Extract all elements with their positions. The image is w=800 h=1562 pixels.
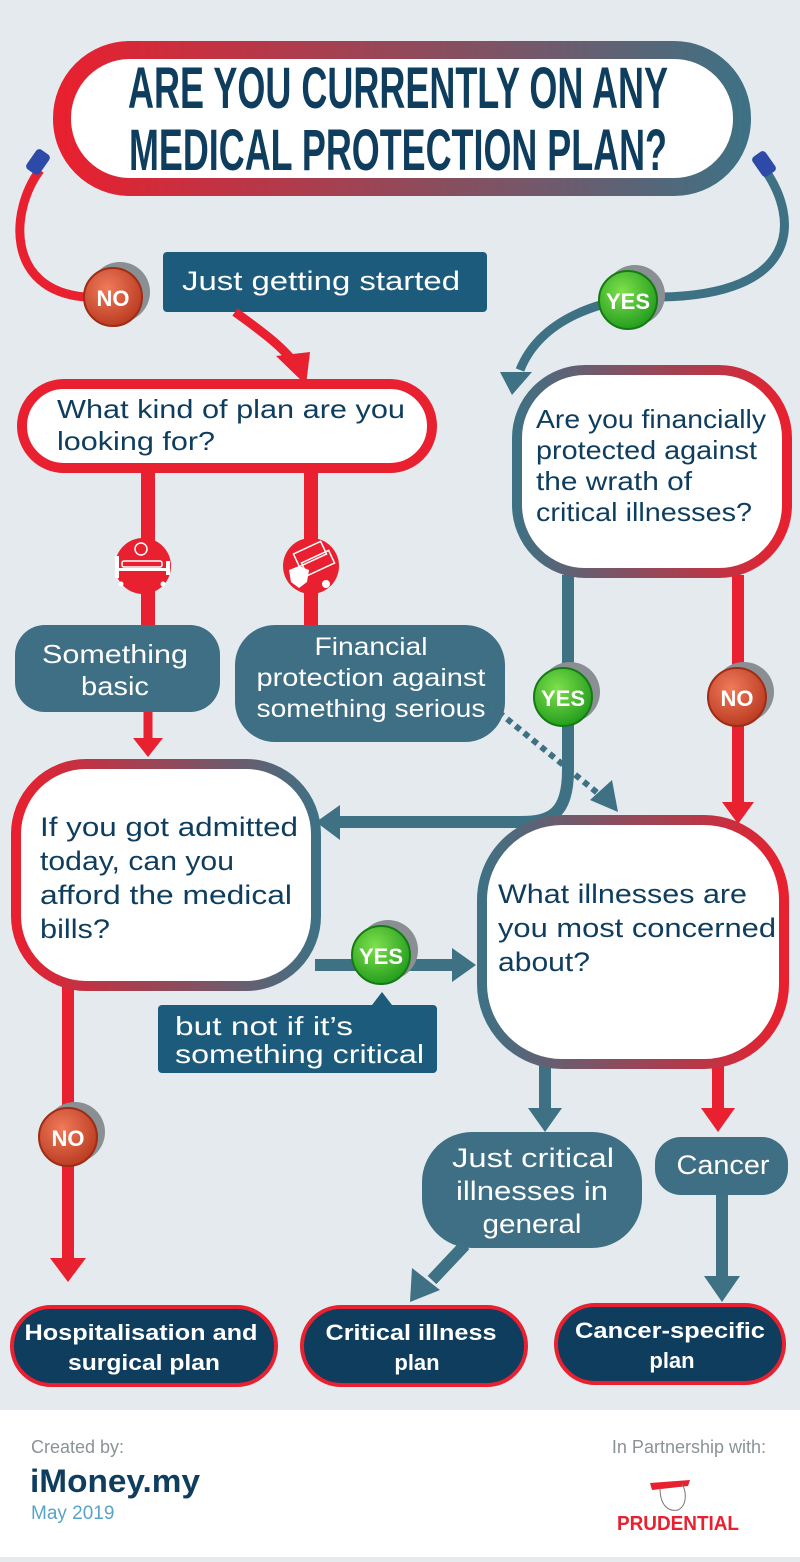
question: what kind of plan xyxy=(22,384,432,468)
footer: partnership xyxy=(612,1437,766,1535)
pill: something basic: Something xyxy=(42,639,188,669)
footer: partnership: In Partnership with: xyxy=(612,1437,766,1457)
footer: created by: iMoney.my xyxy=(30,1463,200,1499)
pill: just critical: general xyxy=(482,1209,582,1239)
button: NO top: NO xyxy=(96,286,130,311)
button: YES mid: YES xyxy=(541,686,585,711)
plan: hospitalisation: surgical plan xyxy=(68,1350,220,1375)
label: but not if critical: something critical xyxy=(175,1039,424,1069)
button: NO top xyxy=(84,262,150,326)
button: NO mid: NO xyxy=(720,686,754,711)
plan: cancer-specific xyxy=(556,1305,784,1383)
arrow: to cancer plan xyxy=(704,1195,740,1302)
question: illnesses xyxy=(482,820,784,1064)
arrow: to what kind of plan xyxy=(235,312,310,385)
connectors: illnesses branches xyxy=(528,1060,735,1132)
question: what kind of plan: looking for? xyxy=(57,426,215,456)
footer: created by: Created by: xyxy=(31,1437,124,1457)
pill: financial protection: something serious xyxy=(256,695,486,723)
question: admitted: bills? xyxy=(40,914,110,944)
question: admitted: afford the medical xyxy=(40,880,292,910)
pill: financial protection: protection against xyxy=(256,664,486,692)
icon: hospital bed xyxy=(115,538,171,594)
question: financially protected: protected against xyxy=(536,435,758,465)
button: NO mid xyxy=(708,662,774,726)
footer: created by xyxy=(30,1437,200,1524)
arrow: basic to admitted question xyxy=(133,712,163,757)
plan: critical illness xyxy=(302,1307,526,1385)
label: but not if critical xyxy=(158,992,437,1073)
icon: money shield xyxy=(283,538,339,594)
button: NO lower xyxy=(39,1102,105,1166)
connectors: plan type branches xyxy=(148,472,311,630)
label: just getting started xyxy=(163,252,487,312)
question: admitted: If you got admitted xyxy=(40,812,298,842)
question: admitted xyxy=(16,764,316,986)
question: admitted: today, can you xyxy=(40,846,234,876)
pill: something basic xyxy=(15,625,220,712)
pill: financial protection xyxy=(235,625,505,742)
label: just getting started: Just getting started xyxy=(182,266,460,296)
pill: cancer: Cancer xyxy=(676,1150,770,1180)
connector: YES curve from title xyxy=(520,170,784,370)
plan: critical illness: Critical illness xyxy=(326,1320,496,1345)
question: financially protected xyxy=(517,370,787,573)
question: illnesses: about? xyxy=(498,947,590,977)
plan: cancer-specific: Cancer-specific xyxy=(575,1318,765,1343)
connector: YES from financial to admitted xyxy=(316,575,568,840)
connector: admitted NO down xyxy=(50,985,86,1282)
pill: just critical: illnesses in xyxy=(456,1176,608,1206)
button: YES mid xyxy=(534,662,600,726)
icon: plug right xyxy=(751,150,777,178)
connector: NO curve from title xyxy=(20,170,85,297)
question: what kind of plan: What kind of plan are you xyxy=(57,394,405,424)
label: but not if critical: but not if it’s xyxy=(175,1011,353,1041)
question: financially protected: the wrath of xyxy=(536,466,693,496)
arrow: to critical plan xyxy=(410,1245,465,1302)
arrow: dotted serious to illnesses xyxy=(490,705,618,812)
title xyxy=(62,50,742,187)
button: YES admitted: YES xyxy=(359,944,403,969)
connector: admitted YES right xyxy=(315,948,476,982)
footer: created by: May 2019 xyxy=(31,1503,114,1524)
question: financially protected: Are you financially xyxy=(536,404,766,434)
plan: hospitalisation xyxy=(12,1307,276,1385)
button: YES top xyxy=(599,265,665,329)
pill: just critical: Just critical xyxy=(452,1143,614,1173)
pill: financial protection: Financial xyxy=(314,633,428,661)
button: NO lower: NO xyxy=(52,1126,84,1151)
question: illnesses: What illnesses are xyxy=(498,879,747,909)
plan: hospitalisation: Hospitalisation and xyxy=(24,1320,258,1345)
pill: something basic: basic xyxy=(81,671,149,701)
plan: cancer-specific: plan xyxy=(649,1348,695,1373)
pill: just critical xyxy=(422,1132,642,1248)
question: financially protected: critical illnesses? xyxy=(536,497,752,527)
connector: NO from financial to illnesses xyxy=(722,575,754,824)
button: YES top: YES xyxy=(606,289,650,314)
button: YES admitted xyxy=(352,920,418,984)
pill: cancer xyxy=(655,1137,788,1195)
footer: partnership: PRUDENTIAL xyxy=(617,1513,739,1535)
icon: plug left xyxy=(25,148,51,176)
arrow: yes to financial question xyxy=(500,372,532,395)
plan: critical illness: plan xyxy=(394,1350,440,1375)
question: illnesses: you most concerned xyxy=(498,913,776,943)
